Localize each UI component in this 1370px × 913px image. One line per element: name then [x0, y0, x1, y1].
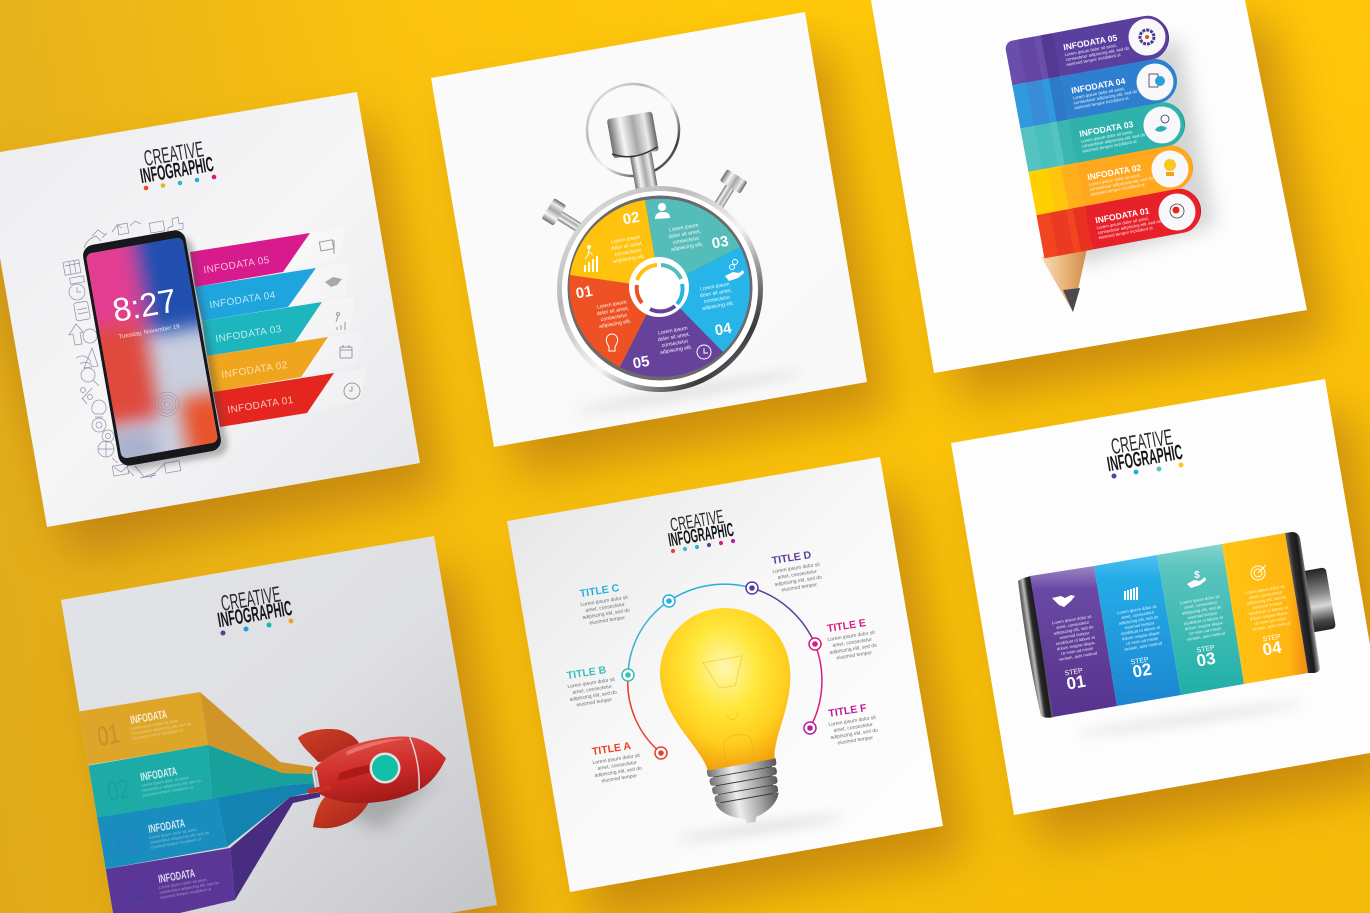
segment 03: dolor sit amet, [668, 229, 702, 240]
cell 3: adipiscing elit, sed do [1181, 604, 1222, 616]
label: title D: TITLE D [771, 549, 812, 567]
row 02: Lorem ipsum dolor sit amet, [1088, 172, 1141, 187]
segment 05: Lorem ipsum [658, 325, 688, 337]
segment icons [584, 203, 744, 359]
cell 2: amet, consectetur [1121, 609, 1155, 620]
cell 3: dolore magna aliqua. [1185, 620, 1224, 631]
cell 2: eiusmod tempor [1124, 620, 1155, 630]
cell 1: adipiscing elit, sed do [1053, 624, 1094, 636]
cell 2: Ut enim ad minim [1126, 636, 1159, 646]
label: title D [770, 548, 824, 594]
label: title C [578, 581, 632, 627]
band 03: eiusmod tempor incididunt ut [150, 836, 202, 850]
cell 2: incididunt ut labore et [1120, 624, 1161, 636]
label: title F [826, 701, 880, 747]
band 01: 01 [95, 718, 122, 752]
band 04: 04 [122, 877, 149, 911]
cell 3: STEP [1196, 644, 1216, 655]
segment 05: consectetur [661, 338, 689, 349]
badge: target [1128, 18, 1166, 56]
row 01: INFODATA 01 [1094, 206, 1150, 225]
label: title C: TITLE C [579, 582, 620, 600]
panel: rocket infographic [61, 536, 497, 913]
band 03: Lorem ipsum dolor sit amet, [148, 827, 198, 840]
band 01 [70, 692, 313, 774]
node: title A [655, 747, 667, 759]
cell 3: eiusmod tempor [1187, 610, 1218, 620]
pencil body rows [1004, 12, 1205, 258]
cell 4: veniam, quis nostrud [1252, 620, 1291, 632]
label: title F: adipiscing elit, sed do [830, 728, 879, 741]
segment 02: consectetur [614, 247, 642, 258]
label: title B: eiusmod tempor [576, 697, 613, 708]
ribbon 02: INFODATA 02 [221, 360, 289, 381]
row 02: consectetur adipiscing elit, sed do [1089, 175, 1154, 192]
band 02: INFODATA [139, 766, 178, 784]
panel: battery infographic [951, 379, 1370, 815]
row 05: INFODATA 05 [1062, 32, 1118, 52]
label: title F: TITLE F [828, 702, 868, 720]
battery caps and terminal [1018, 532, 1336, 718]
band 01: INFODATA [129, 709, 168, 727]
segment 02: dolor sit amet, [610, 241, 644, 252]
row 02: eiusmod tempor incididunt ut [1090, 182, 1146, 197]
band 02: eiusmod tempor incididunt ut [142, 784, 194, 798]
segment 04: adipiscing elit. [702, 300, 735, 312]
label: title E: TITLE E [826, 617, 867, 635]
title: creative infographic: CREATIVE [669, 507, 725, 536]
cell 1: eiusmod tempor [1059, 630, 1090, 640]
phone screen [86, 238, 218, 458]
icon: target [1251, 565, 1266, 580]
badge: figure [1144, 106, 1180, 144]
ground shadow [675, 813, 845, 843]
label: title A [590, 739, 644, 785]
band 02: consectetur adipiscing elit, sed do [141, 778, 202, 793]
segment 04: dolor sit amet, [699, 288, 733, 299]
rocket window [370, 752, 400, 784]
badge: chart [1136, 64, 1174, 100]
cell 3: Lorem ipsum dolor sit [1180, 594, 1221, 605]
label: title E [825, 616, 879, 662]
cell 1 [1030, 566, 1117, 717]
label: title B [565, 663, 619, 709]
row 01 [1036, 185, 1205, 258]
label: title B: TITLE B [566, 664, 607, 682]
label: title E: Lorem ipsum dolor sit [827, 630, 876, 643]
pie segments [569, 199, 750, 377]
row 05 [1004, 12, 1173, 85]
doodle icons around phone [63, 217, 183, 478]
band 02: 02 [105, 773, 132, 807]
row icon badges [1128, 18, 1196, 230]
row 04: Lorem ipsum dolor sit amet, [1072, 86, 1125, 101]
icon: hand with coin [1187, 570, 1206, 588]
ground shadow [576, 369, 804, 415]
cell 1: veniam, quis nostrud [1059, 650, 1098, 662]
title: creative infographic: CREATIVE [1109, 424, 1174, 459]
cell 2: adipiscing elit, sed do [1118, 614, 1159, 626]
band 03: INFODATA [147, 818, 186, 836]
panel: light bulb infographic [507, 457, 943, 892]
row 04: INFODATA 04 [1070, 76, 1126, 96]
cell 2: veniam, quis nostrud [1124, 640, 1163, 652]
rocket fins [298, 729, 359, 762]
label: title B: amet, consectetur [572, 684, 613, 696]
cell 4: dolore magna aliqua. [1250, 610, 1289, 621]
label: title D: eiusmod tempor [781, 582, 818, 593]
label: title B: Lorem ipsum dolor sit [567, 677, 616, 690]
cell 4: STEP [1262, 633, 1282, 644]
info ribbons [190, 227, 367, 427]
segment 02: adipiscing elit. [613, 253, 646, 265]
label: title E: adipiscing elit, sed do [829, 643, 878, 656]
segment 02 [570, 200, 660, 288]
label: title F: Lorem ipsum dolor sit [828, 715, 877, 728]
label: title C: Lorem ipsum dolor sit [580, 595, 629, 608]
cell 3: Ut enim ad minim [1189, 626, 1222, 636]
band 04: INFODATA [157, 868, 196, 886]
segment 03: Lorem ipsum [669, 222, 699, 234]
ribbon 03: INFODATA 03 [215, 324, 283, 345]
title: creative infographic: INFOGRAPHIC [667, 520, 736, 551]
label: title F: eiusmod tempor [837, 735, 874, 746]
badge: head [1158, 194, 1196, 230]
row 04: consectetur adipiscing elit, sed do [1073, 89, 1138, 105]
cell 3: veniam, quis nostrud [1187, 630, 1226, 642]
pencil tip [1041, 249, 1087, 312]
cell 2 [1094, 555, 1181, 706]
label: title A: Lorem ipsum dolor sit [592, 753, 641, 766]
cell 1: amet, consectetur [1056, 619, 1090, 630]
segment 05: dolor sit amet, [657, 332, 691, 343]
segment 01 [569, 275, 660, 367]
cell 3: incididunt ut labore et [1183, 614, 1224, 626]
title: creative infographic: CREATIVE [219, 581, 282, 616]
segment 05: 05 [632, 353, 651, 372]
segment 02: Lorem ipsum [611, 234, 641, 246]
label: title A: eiusmod tempor [601, 773, 638, 784]
band 04: eiusmod tempor incididunt ut [160, 886, 212, 900]
node: title B [622, 669, 634, 681]
band 04: Lorem ipsum dolor sit amet, [158, 877, 208, 890]
segment 01: 01 [575, 283, 594, 302]
cell 1: Lorem ipsum dolor sit [1052, 614, 1093, 625]
label: title F: amet, consectetur [833, 722, 874, 734]
label: title E: eiusmod tempor [836, 650, 873, 661]
band 04: consectetur adipiscing elit, sed do [159, 880, 220, 895]
segment 03 [645, 199, 740, 288]
band 04 [100, 792, 320, 913]
title: creative infographic: INFOGRAPHIC [138, 153, 215, 188]
label: title C: amet, consectetur [585, 602, 626, 614]
band 01: consectetur adipiscing elit, sed do [131, 721, 192, 736]
cell 4: Ut enim ad minim [1254, 616, 1287, 626]
title: creative infographic [1106, 424, 1184, 478]
band 03: consectetur adipiscing elit, sed do [149, 830, 210, 845]
row 03: consectetur adipiscing elit, sed do [1081, 132, 1146, 149]
smartphone: Tuesday, November 19 [118, 324, 181, 341]
segment 05 [620, 288, 723, 377]
light bulb [650, 598, 815, 834]
segment 01: consectetur [600, 312, 628, 323]
rocket body [301, 728, 451, 814]
badge: idea [1152, 150, 1188, 188]
segment 04: Lorem ipsum [700, 281, 730, 293]
label: title A: TITLE A [591, 740, 632, 758]
node: title D [746, 582, 758, 594]
icon: hand with coin: $ [1194, 570, 1200, 581]
segment 01: adipiscing elit. [599, 318, 632, 330]
title: creative infographic: INFOGRAPHIC [1106, 441, 1184, 476]
ribbon 01: INFODATA 01 [227, 395, 295, 416]
band 01: Lorem ipsum dolor sit amet, [130, 718, 180, 731]
label: title B: adipiscing elit, sed do [569, 690, 618, 703]
cell 4: eiusmod tempor [1252, 600, 1283, 610]
segment 03: 03 [711, 233, 730, 252]
band 03 [90, 783, 318, 870]
icon: handshake [1052, 595, 1075, 607]
row 02 [1028, 142, 1197, 215]
segment 04: consectetur [703, 294, 731, 305]
cell 1: 01 [1065, 672, 1087, 694]
cell 1: incididunt ut labore et [1055, 634, 1096, 646]
cell 4 [1222, 533, 1308, 684]
cell 2: Lorem ipsum dolor sit [1117, 604, 1158, 615]
ribbon 01 [213, 373, 334, 427]
label: title D: adipiscing elit, sed do [774, 575, 823, 588]
cell 2: dolore magna aliqua. [1122, 630, 1161, 641]
bulb filament [703, 656, 761, 767]
ribbon icons [319, 240, 360, 399]
rocket [298, 728, 451, 830]
cell 1: Ut enim ad minim [1061, 646, 1094, 656]
row 03: INFODATA 03 [1078, 119, 1134, 139]
panel: stopwatch pie chart [431, 12, 867, 447]
pencil soft shadow [1025, 40, 1215, 265]
segment 02: 02 [622, 209, 641, 228]
node: title C [663, 595, 675, 607]
segment 04 [660, 247, 750, 352]
label: title D: Lorem ipsum dolor sit [772, 562, 821, 575]
cell 3 [1157, 544, 1244, 695]
label: title C: adipiscing elit, sed do [582, 608, 631, 621]
ribbon 03 [202, 302, 322, 356]
title: creative infographic [216, 581, 294, 636]
label: title E: amet, consectetur [832, 637, 873, 649]
cell 4: incididunt ut labore et [1248, 604, 1289, 616]
cell 4: Lorem ipsum dolor sit [1245, 584, 1286, 595]
row 01: Lorem ipsum dolor sit amet, [1096, 216, 1149, 230]
ribbon 04 [195, 268, 316, 321]
connector arc [628, 584, 822, 753]
row 05: consectetur adipiscing elit, sed do [1065, 45, 1130, 62]
label: title A: amet, consectetur [597, 760, 638, 772]
cell 3: 03 [1195, 649, 1217, 671]
ribbon 05 [190, 233, 310, 287]
node: title F [804, 722, 816, 734]
lock-screen time: 8:27 [110, 281, 179, 329]
cell 4: 04 [1261, 638, 1284, 660]
folded bands [70, 692, 320, 913]
title: creative infographic: CREATIVE [142, 136, 205, 171]
ribbon 02 [207, 337, 328, 392]
segment 04: 04 [714, 320, 734, 339]
row 03: eiusmod tempor incididunt ut [1082, 139, 1138, 154]
cell 4: adipiscing elit, sed do [1246, 594, 1287, 606]
bulb glass [650, 598, 805, 776]
ribbon 04: INFODATA 04 [209, 290, 277, 311]
cell 2: STEP [1130, 656, 1150, 667]
segment 05: adipiscing elit. [660, 344, 693, 356]
panel: pencil infographic [871, 0, 1307, 373]
row 05: Lorem ipsum dolor sit amet, [1064, 43, 1117, 57]
segment 01: Lorem ipsum [597, 299, 627, 311]
cell 3: amet, consectetur [1184, 599, 1218, 610]
cell 1: dolore magna aliqua. [1057, 640, 1096, 651]
segment 03: adipiscing elit. [671, 241, 704, 253]
segment 01: dolor sit amet, [596, 306, 630, 317]
row 01: eiusmod tempor incididunt ut [1098, 225, 1154, 240]
band 02: Lorem ipsum dolor sit amet, [140, 775, 190, 788]
icon: bar chart [1124, 587, 1138, 600]
cell 4: amet, consectetur [1249, 589, 1283, 600]
stopwatch hardware [542, 84, 763, 392]
ribbon 05: INFODATA 05 [203, 255, 271, 276]
label: title D: amet, consectetur [777, 569, 818, 581]
label: title C: eiusmod tempor [589, 615, 626, 626]
row 01: consectetur adipiscing elit, sed do [1097, 218, 1162, 235]
cell 2: 02 [1131, 660, 1153, 682]
row 02: INFODATA 02 [1086, 162, 1142, 182]
band 01: eiusmod tempor incididunt ut [132, 727, 184, 741]
segment 03: consectetur [672, 235, 700, 246]
smartphone [83, 230, 230, 473]
title: creative infographic [667, 507, 736, 553]
band 02 [80, 745, 317, 820]
title: creative infographic: INFOGRAPHIC [216, 597, 294, 632]
band 03: 03 [114, 826, 141, 860]
title: creative infographic [138, 136, 216, 190]
row 03 [1020, 99, 1189, 172]
ground shadow [1076, 700, 1304, 738]
cell 1: STEP [1064, 667, 1084, 678]
label: title A: adipiscing elit, sed do [594, 766, 643, 779]
row 04: eiusmod tempor incididunt ut [1074, 95, 1130, 110]
row 05: eiusmod tempor incididunt ut [1066, 52, 1122, 67]
fingerprint [153, 390, 181, 418]
row 04 [1012, 56, 1181, 129]
panel: smartphone infographic [0, 92, 420, 527]
node: title E [809, 638, 821, 650]
centre hub [629, 257, 689, 317]
row 03: Lorem ipsum dolor sit amet, [1080, 129, 1133, 144]
bulb screw base [706, 757, 786, 829]
